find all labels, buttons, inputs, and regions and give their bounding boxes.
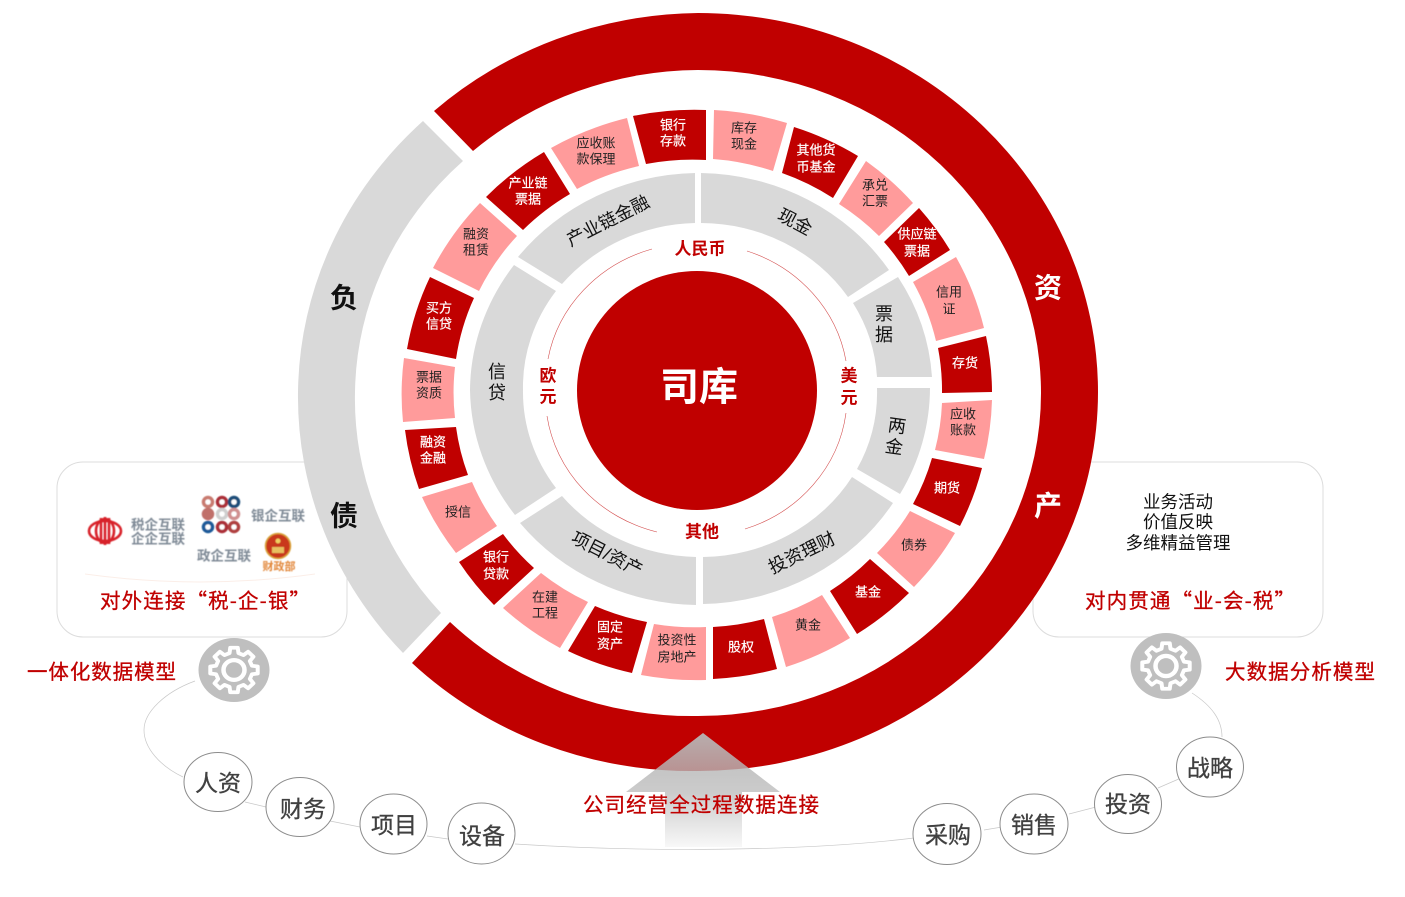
segment: 信贷: 贷: [488, 383, 506, 403]
icon: national emblem: [265, 533, 291, 559]
tile: 信用证: 信用: [936, 284, 962, 300]
segment: 现金: 现金: [774, 205, 816, 239]
tile: 固定资产: [568, 606, 647, 673]
text: government link label: 政企互联: [197, 548, 251, 564]
node: 财务: 财务: [280, 796, 326, 822]
tile: 在建工程: [503, 573, 588, 648]
inner grey ring: business categories: [470, 173, 932, 605]
segment: 两金: 两: [887, 415, 907, 437]
tile: 银行贷款: [459, 534, 534, 605]
segment: 两金: 金: [884, 436, 904, 458]
segment: 两金: [857, 388, 930, 494]
ring labels: 债: [330, 500, 358, 532]
segment: 投资理财: 投资理财: [765, 528, 839, 578]
segment: 投资理财: [703, 477, 893, 604]
tile: 银行贷款: 贷款: [483, 566, 509, 582]
tile: 银行存款: 存款: [660, 134, 686, 148]
tile: 投资性房地产: 房地产: [657, 650, 697, 664]
tile: 产业链票据: 产业链: [508, 176, 548, 190]
core circle: 司库: 司库: [660, 366, 738, 410]
tile: 存货: [938, 336, 992, 393]
node: 战略: 战略: [1187, 755, 1233, 781]
node: 投资: [1094, 774, 1162, 834]
ring labels: 资: [1034, 272, 1062, 304]
text: bank link label: 银企互联: [251, 508, 305, 524]
tile: 债券: 债券: [901, 538, 927, 552]
text: enterprise link label: 企企互联: [131, 530, 185, 546]
tile: 银行存款: 银行: [660, 118, 686, 132]
text: internal card description: [1126, 492, 1230, 553]
tile: 融资金融: 金融: [420, 450, 446, 466]
node: 销售: 销售: [1011, 812, 1057, 838]
node: 战略: [1176, 737, 1244, 797]
tile: 其他货币基金: 其他货: [796, 142, 836, 158]
node: 采购: [913, 804, 981, 864]
tile: 应收账款保理: 款保理: [576, 152, 616, 166]
tile: 买方信贷: [407, 277, 474, 359]
text: ministry of finance: 财政部: [262, 559, 296, 573]
icon: big data model gear: [1130, 633, 1202, 699]
text: tax link label: 税企互联: [131, 516, 185, 532]
node: 采购: 采购: [925, 822, 971, 848]
tile: 固定资产: 固定: [597, 620, 623, 634]
text: internal card description: 业务活动: [1143, 492, 1213, 512]
node: 人资: [184, 752, 252, 812]
connector line: [144, 681, 1222, 849]
tile: 买方信贷: 买方: [426, 300, 452, 316]
tile: 基金: [830, 559, 909, 634]
tile: 买方信贷: 信贷: [426, 316, 452, 332]
tile: 授信: 授信: [445, 504, 471, 520]
tile: 其他货币基金: [782, 127, 858, 198]
tile: 银行贷款: 银行: [483, 550, 509, 564]
panel: internal connection card: [1033, 462, 1323, 637]
text: integrated data model: 一体化数据模型: [27, 655, 176, 685]
currency labels: [540, 240, 858, 542]
segment: 项目/资产: [520, 496, 696, 605]
text: big data analysis model: 大数据分析模型: [1225, 655, 1375, 685]
tile: 承兑汇票: 汇票: [862, 194, 888, 208]
tile: 黄金: 黄金: [795, 618, 821, 632]
ring labels: [330, 272, 1062, 532]
tile: 承兑汇票: [839, 161, 913, 236]
tile: 票据资质: [402, 358, 455, 422]
tile: 存货: 存货: [952, 356, 978, 370]
tile: 融资租赁: 融资: [463, 226, 489, 242]
icon: integrated model gear: [198, 638, 270, 702]
segment: 产业链金融: 产业链金融: [563, 192, 653, 250]
core circle: 司库: [577, 271, 817, 510]
panel: external connection card: [57, 462, 347, 637]
tile: 应收账款: 账款: [950, 422, 976, 438]
currency labels: 美: [840, 366, 858, 386]
tile: 期货: 期货: [934, 480, 960, 496]
node: 设备: 设备: [459, 823, 505, 849]
segment: 票据: 票: [875, 304, 893, 324]
tile: 信用证: [913, 257, 984, 341]
segment: 票据: 据: [875, 325, 893, 345]
tile: 票据资质: 资质: [416, 386, 442, 400]
arrow: data connection: [626, 733, 780, 847]
icon: tax emblem: [89, 517, 121, 545]
node: 投资: 投资: [1105, 791, 1151, 817]
currency labels: 元: [540, 388, 556, 406]
text: internal card description: 价值反映: [1143, 512, 1213, 532]
tile: 融资租赁: [433, 203, 517, 291]
ring labels: 产: [1034, 490, 1062, 522]
segment: 信贷: 信: [488, 362, 506, 382]
tile: 供应链票据: 供应链: [897, 226, 937, 242]
text: external connection caption: 对外连接“税-企-银”: [100, 584, 310, 614]
tile: 供应链票据: 票据: [904, 244, 930, 258]
text: data connection caption: 公司经营全过程数据连接: [583, 788, 819, 818]
tile ring: asset and liability items: [402, 110, 992, 680]
tile: 融资租赁: 租赁: [463, 242, 489, 258]
tile: 应收账款保理: [551, 118, 639, 189]
tile: 基金: 基金: [855, 584, 881, 600]
tile: 产业链票据: [486, 152, 570, 230]
logos: tax, bank and government links: [89, 498, 305, 573]
tile: 库存现金: 现金: [731, 136, 757, 152]
node: 财务: [266, 778, 334, 836]
tile: 股权: 股权: [728, 640, 754, 654]
tile: 在建工程: 在建: [532, 590, 558, 604]
node: 人资: 人资: [195, 770, 241, 796]
tile: 库存现金: [713, 110, 787, 171]
tile: 库存现金: 库存: [731, 120, 757, 136]
tile: 票据资质: 票据: [416, 370, 442, 384]
text: internal card description: 多维精益管理: [1126, 533, 1230, 553]
tile: 供应链票据: [884, 208, 950, 276]
node: 项目: [360, 794, 427, 854]
currency labels: 人民币: [674, 240, 726, 258]
tile: 投资性房地产: 投资性: [657, 632, 697, 648]
currency labels: 元: [840, 388, 858, 408]
tile: 债券: [877, 511, 955, 587]
outer ring: assets (red): [412, 13, 1098, 771]
outer ring: liabilities (grey): [298, 121, 463, 653]
tile: 期货: [913, 458, 982, 526]
text: internal connection caption: 对内贯通“业-会-税”: [1085, 584, 1295, 614]
node: 设备: [448, 803, 515, 864]
segment: 项目/资产: 项目/资产: [568, 528, 646, 580]
node: 项目: 项目: [371, 812, 417, 838]
tile: 授信: [422, 482, 497, 553]
tile: 固定资产: 资产: [597, 636, 623, 652]
tile: 黄金: [772, 595, 850, 667]
tile: 融资金融: 融资: [420, 434, 446, 450]
segment: 现金: [701, 173, 889, 297]
tile: 信用证: 证: [942, 302, 956, 316]
segment: 票据: [853, 277, 932, 377]
ring labels: 负: [330, 282, 358, 314]
currency labels: 欧: [540, 366, 556, 386]
tile: 其他货币基金: 币基金: [796, 160, 836, 174]
tile: 承兑汇票: 承兑: [862, 178, 888, 192]
tile: 应收账款: 应收: [950, 406, 976, 422]
tile: 在建工程: 工程: [532, 606, 558, 620]
tile: 股权: [713, 619, 777, 679]
segment: 信贷: [470, 265, 556, 515]
segment: 产业链金融: [518, 173, 695, 284]
tile: 应收账款保理: 应收账: [576, 136, 616, 150]
tile: 投资性房地产: [641, 624, 706, 680]
icon: bank logos grid: [204, 498, 238, 532]
tile: 融资金融: [405, 427, 468, 489]
node: 销售: [1000, 794, 1068, 854]
tile: 产业链票据: 票据: [515, 192, 541, 206]
tile: 应收账款: [935, 400, 992, 459]
tile: 银行存款: [633, 110, 706, 164]
thin currency arcs: [547, 249, 846, 532]
currency labels: 其他: [685, 522, 719, 542]
